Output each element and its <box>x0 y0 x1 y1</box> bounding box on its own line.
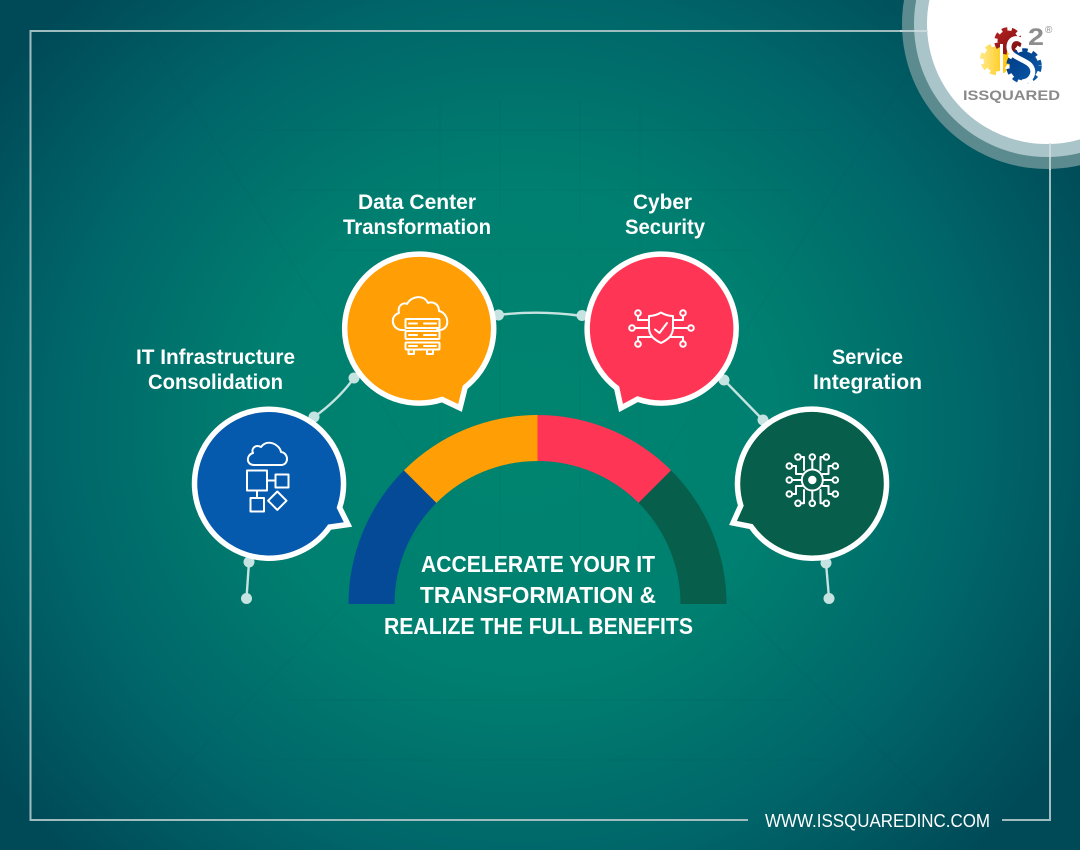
logo 2 mark: 2 <box>1028 24 1044 51</box>
gauge segment: red <box>538 415 671 503</box>
label: Transformation <box>343 216 491 239</box>
icon: cloud and flow chart <box>247 443 288 512</box>
registered mark: ® <box>1045 25 1053 36</box>
icon: circuit gear <box>786 454 838 506</box>
panel: Service Integration <box>733 346 922 558</box>
panel: IT Infrastructure Consolidation <box>136 346 348 558</box>
label: Consolidation <box>148 371 283 394</box>
label <box>813 346 922 394</box>
panel: Data Center Transformation <box>343 191 494 408</box>
central heading: ACCELERATE YOUR IT <box>421 551 655 577</box>
label <box>625 191 705 239</box>
icon: cloud server <box>393 297 447 354</box>
icon: shield with circuit <box>629 310 694 347</box>
central heading: REALIZE THE FULL BENEFITS <box>384 613 693 639</box>
panel: Cyber Security <box>587 191 736 408</box>
label: Service <box>832 346 903 369</box>
frame stubs over badge ring <box>900 31 1050 170</box>
speech bubble <box>345 254 494 408</box>
logo badge <box>900 0 1080 170</box>
label <box>343 191 491 239</box>
label: Data Center <box>358 191 476 214</box>
label: Security <box>625 216 705 239</box>
label: IT Infrastructure <box>136 346 295 369</box>
label: Integration <box>813 371 922 394</box>
icon: company gears <box>982 29 1040 82</box>
connector lines <box>241 310 834 604</box>
website url: WWW.ISSQUAREDINC.COM <box>765 810 990 831</box>
gauge segment: orange <box>404 415 538 503</box>
gauge segment: green <box>639 470 726 604</box>
speech bubble <box>195 409 348 558</box>
speech bubble <box>733 409 887 558</box>
central heading <box>384 551 693 639</box>
speech bubble <box>587 254 736 408</box>
gauge segment: blue <box>348 470 436 604</box>
label <box>136 346 295 394</box>
central heading: TRANSFORMATION & <box>420 582 656 608</box>
logo wordmark: ISSQUARED <box>963 87 1060 103</box>
label: Cyber <box>633 191 692 214</box>
semicircle gauge <box>348 415 726 604</box>
